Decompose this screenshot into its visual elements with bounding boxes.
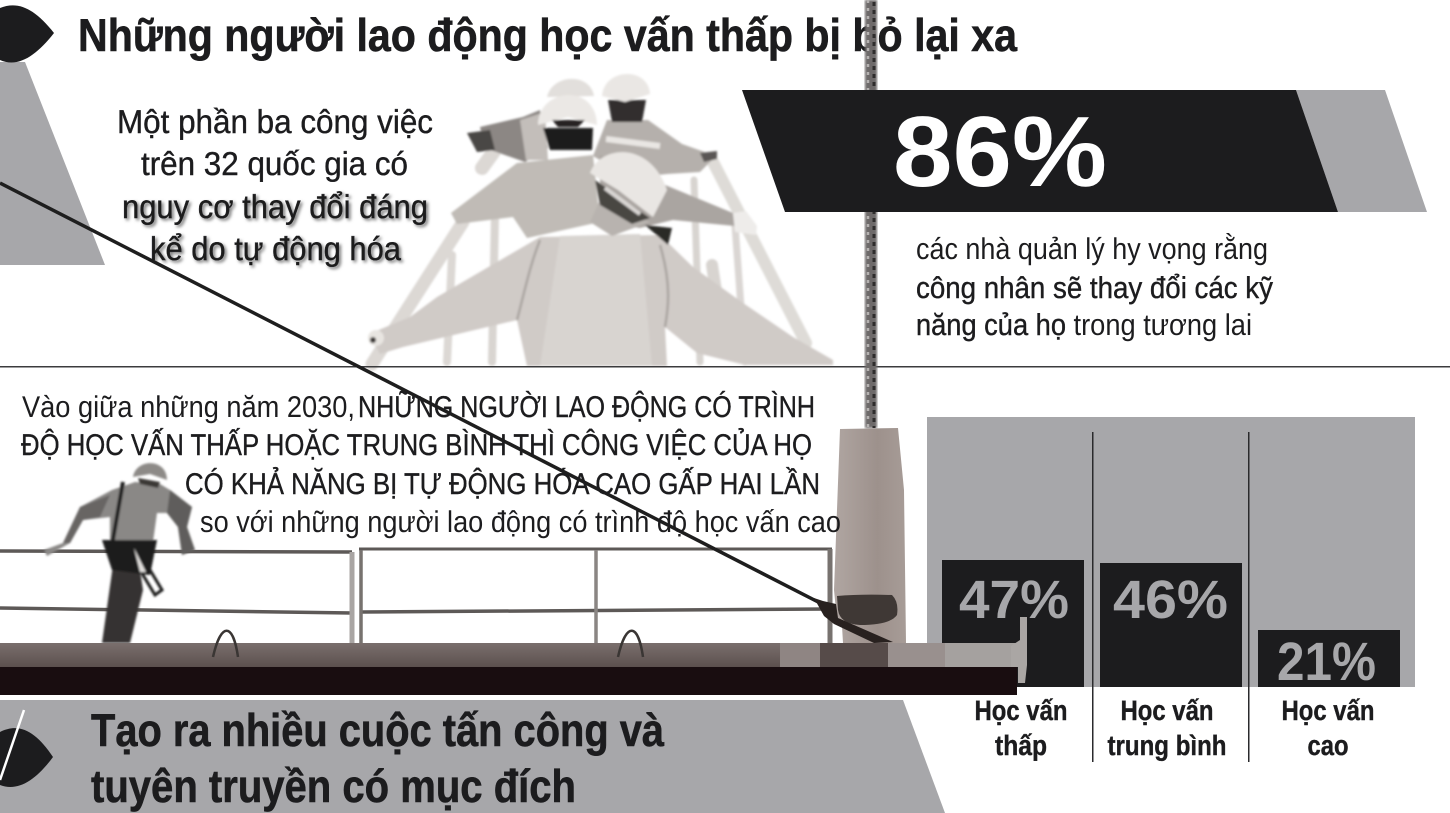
photo: construction workers climbing xyxy=(368,74,833,366)
text block: mid 2030s xyxy=(21,390,841,539)
bar chart: automation risk by education xyxy=(927,417,1415,762)
bar: medium education xyxy=(1100,563,1242,687)
text block: mid 2030s: NHỮNG NGƯỜI LAO ĐỘNG CÓ TRÌNH xyxy=(358,390,815,424)
diagonal cable xyxy=(0,183,893,643)
text block: mid 2030s: so với những người lao động có trình độ học vấn cao xyxy=(200,506,841,539)
label: low education xyxy=(974,695,1068,761)
icon: beam hook left xyxy=(213,631,238,657)
text block: one third of jobs: nguy cơ thay đổi đáng xyxy=(122,188,428,225)
text block: mid 2030s: Vào giữa những năm 2030, xyxy=(22,391,355,424)
beam xyxy=(0,617,1027,695)
bar: low education xyxy=(942,560,1084,687)
bar: high education: 21% xyxy=(1277,632,1376,692)
panel: bottom grey heading band xyxy=(0,700,945,813)
label: high education xyxy=(1282,695,1374,761)
middle worker xyxy=(451,95,757,238)
text block: managers expect: công nhân sẽ thay đổi các kỹ xyxy=(916,272,1273,305)
icon: beam hook right xyxy=(618,631,643,657)
bar: medium education: 46% xyxy=(1113,570,1228,630)
label: high education: cao xyxy=(1308,730,1348,761)
text block: managers expect: năng của họ trong tương lai xyxy=(916,309,1252,342)
black band xyxy=(742,90,1338,212)
icon: bottom heading leaf xyxy=(0,710,53,787)
photo: railing xyxy=(0,549,832,643)
label: low education: thấp xyxy=(995,730,1047,761)
divider xyxy=(0,366,1450,368)
label: medium education: Học vấn xyxy=(1120,695,1214,726)
panel: top-left grey wedge xyxy=(0,62,105,265)
text block: one third of jobs xyxy=(117,103,433,267)
front helmet xyxy=(590,152,672,245)
bar: low education: 47% xyxy=(959,570,1069,630)
text block: one third of jobs: Một phần ba công việc xyxy=(117,103,433,140)
photo: worker on beam xyxy=(44,463,195,643)
panel: 86% xyxy=(742,90,1427,212)
text block: managers expect: các nhà quản lý hy vọng rằng xyxy=(916,232,1268,266)
text block: managers expect xyxy=(916,232,1273,342)
photo: hanging chain xyxy=(865,0,877,428)
heading: targeted attacks: tuyên truyền có mục đích xyxy=(91,760,576,812)
label: medium education: trung bình xyxy=(1108,730,1226,761)
text block: mid 2030s: CÓ KHẢ NĂNG BỊ TỰ ĐỘNG HÓA CAO GẤP HAI LẦN xyxy=(185,467,820,501)
title: Những người lao động học vấn thấp bị bỏ lại xa xyxy=(78,9,1017,61)
back-left worker xyxy=(467,79,594,162)
rails xyxy=(372,150,806,364)
heading: targeted attacks xyxy=(91,704,664,812)
label: low education: Học vấn xyxy=(974,695,1068,726)
icon: top heading leaf xyxy=(0,5,54,62)
photo: concrete block xyxy=(834,428,906,643)
heading: targeted attacks: Tạo ra nhiều cuộc tấn công và xyxy=(91,704,664,756)
beam end stub xyxy=(1011,617,1027,683)
label: medium education xyxy=(1108,695,1226,761)
dark end of the block xyxy=(837,595,897,625)
text block: one third of jobs: trên 32 quốc gia có xyxy=(141,145,408,182)
text block: one third of jobs: kể do tự động hóa xyxy=(150,230,402,267)
back-right worker xyxy=(593,74,717,178)
text block: mid 2030s: ĐỘ HỌC VẤN THẤP HOẶC TRUNG BÌNH THÌ CÔNG VIỆC CỦA HỌ xyxy=(21,428,812,462)
label: high education: Học vấn xyxy=(1282,695,1374,726)
grey stripe xyxy=(1296,90,1427,212)
front worker xyxy=(368,200,833,366)
number: 86% xyxy=(893,96,1107,208)
